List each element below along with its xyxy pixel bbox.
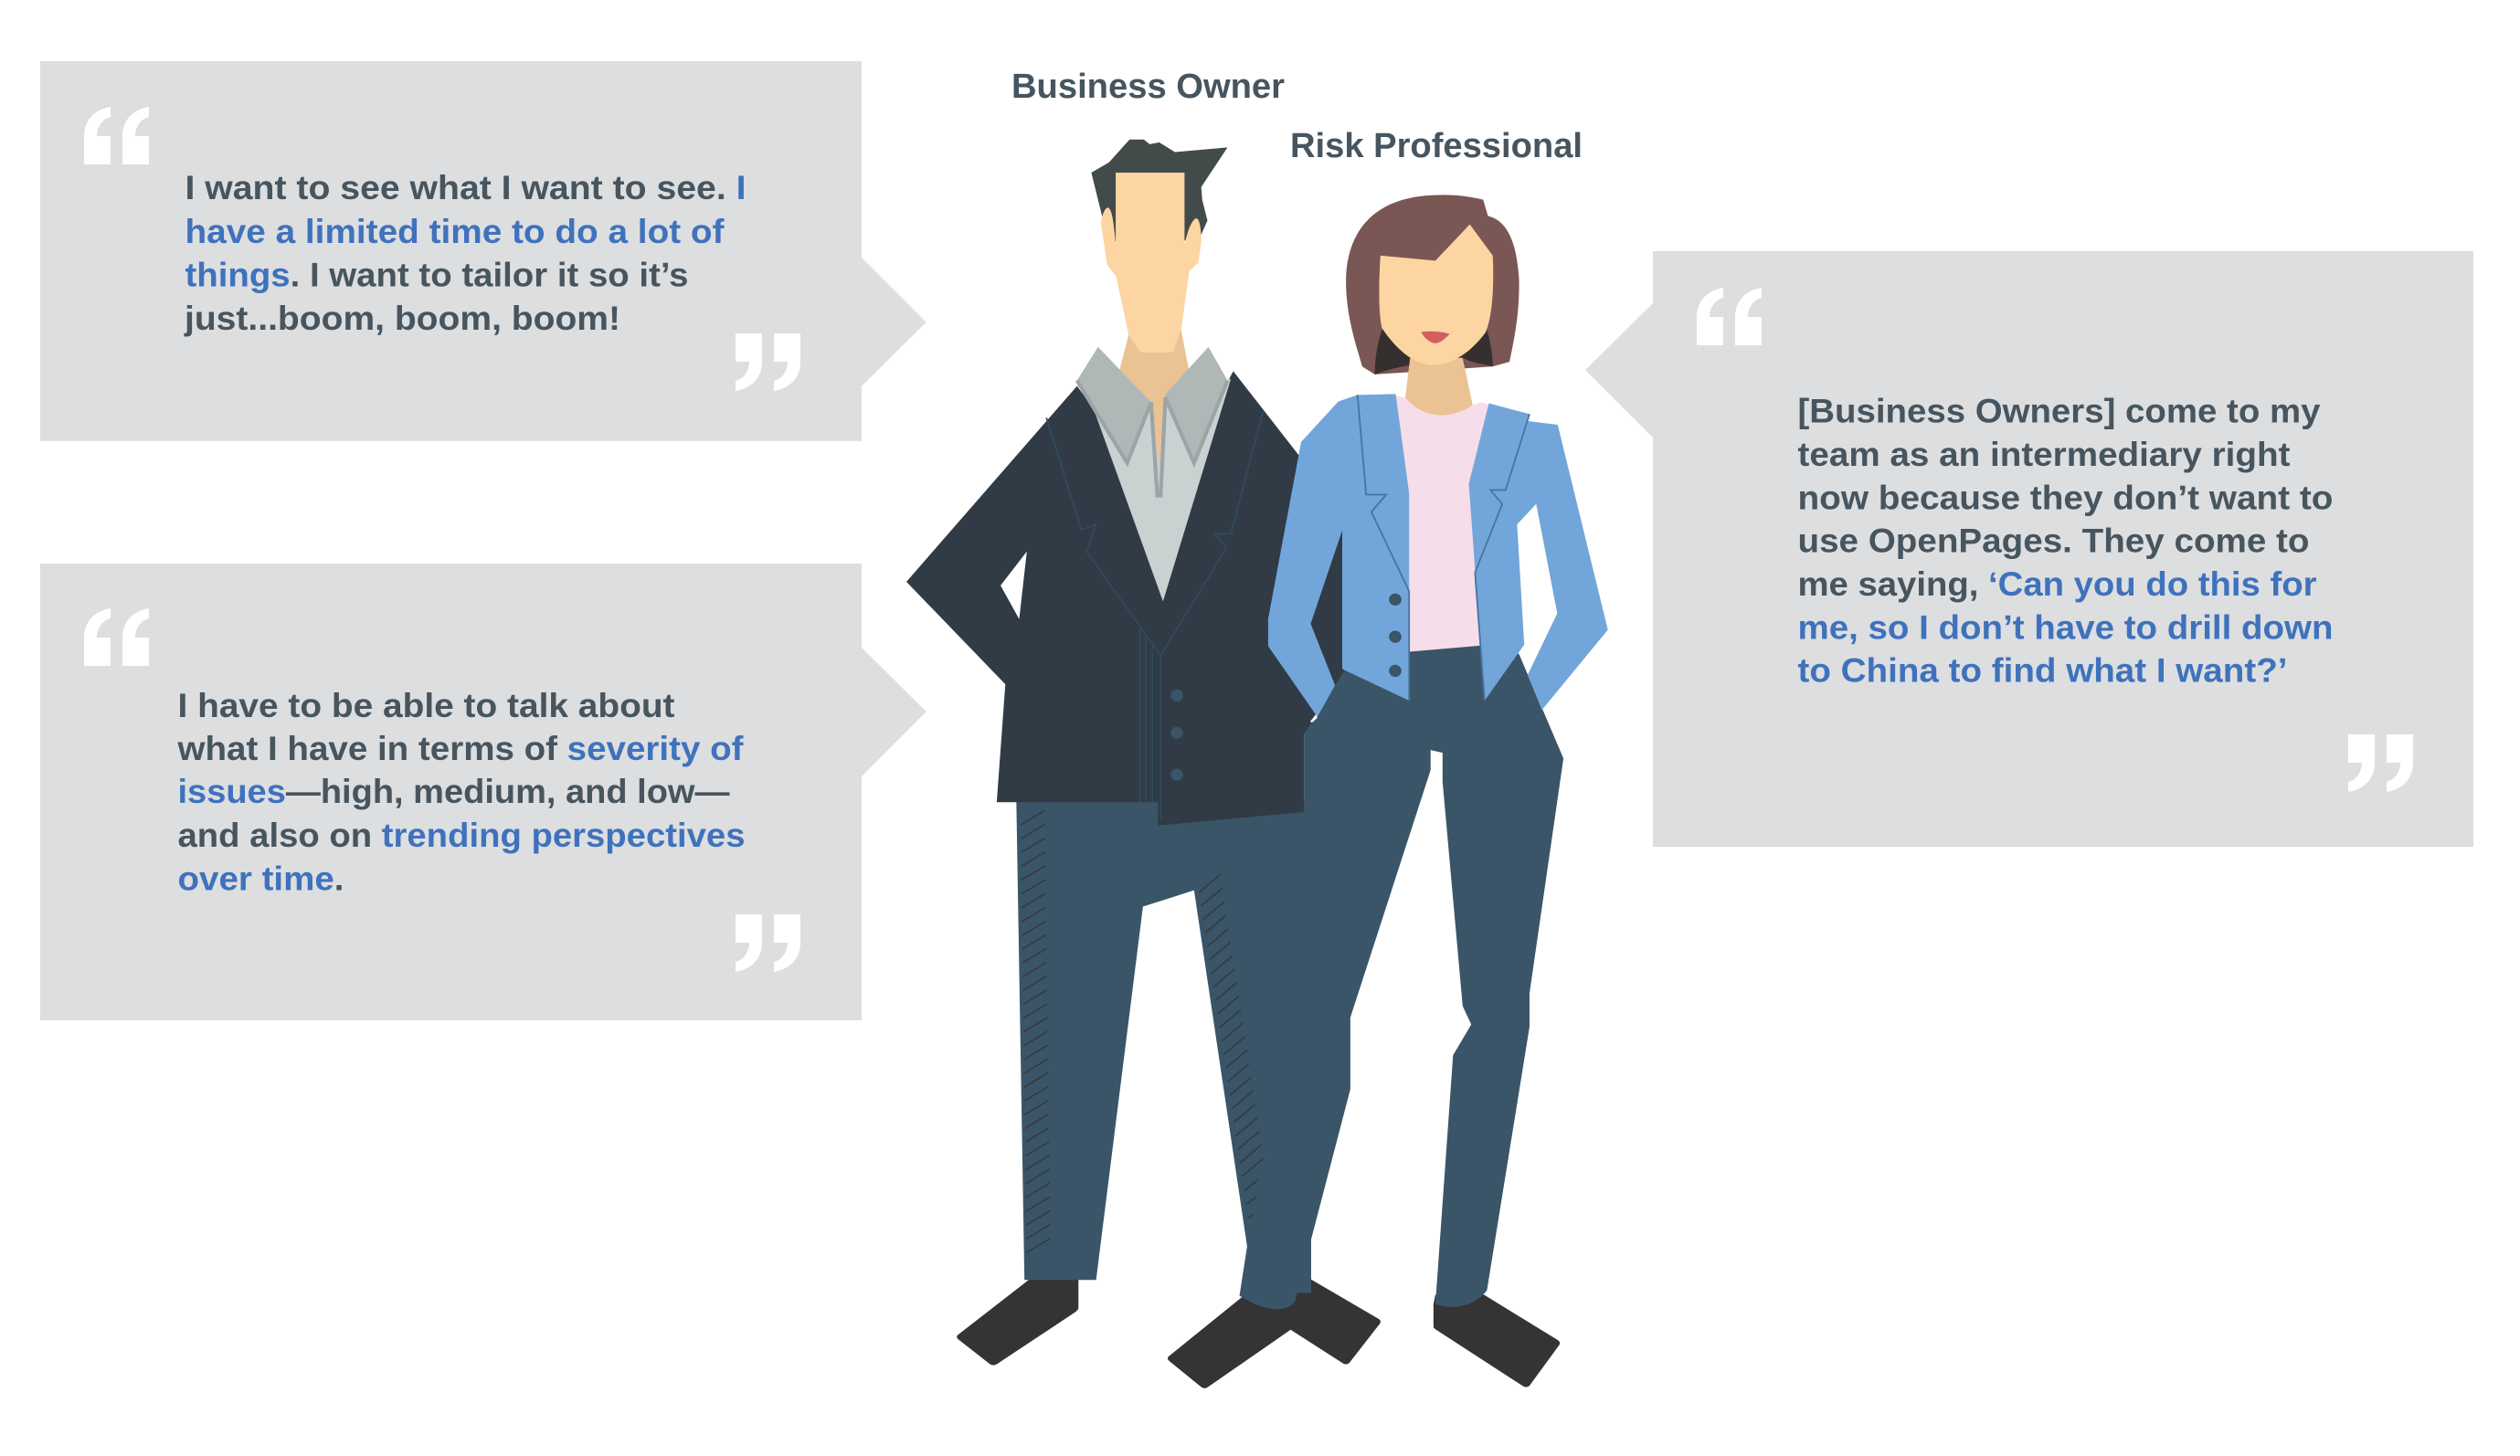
- man: hair: [1091, 140, 1227, 241]
- speech bubble background: [40, 61, 926, 441]
- man: neck: [1119, 330, 1190, 468]
- icon: closing quote mark: [736, 914, 800, 972]
- quote text: to China to find what I want?’: [1798, 650, 2288, 689]
- quote text: things. I want to tailor it so it’s: [185, 256, 689, 294]
- quote text: use OpenPages. They come to: [1798, 521, 2310, 559]
- woman: jacket: [1268, 394, 1608, 717]
- icon: opening quote mark: [1697, 288, 1762, 345]
- quote text: over time.: [177, 859, 344, 897]
- shoes: [957, 1280, 1560, 1388]
- heading: Business Owner: Business Owner: [1011, 68, 1285, 106]
- quote text: [1798, 391, 2334, 689]
- man: collar: [1077, 347, 1227, 496]
- panel: quote top left: [40, 61, 926, 441]
- panel: quote bottom left: [40, 564, 926, 1020]
- illustration: two figures: [906, 140, 1608, 1388]
- icon: opening quote mark: [84, 608, 149, 666]
- quote text: [184, 168, 746, 337]
- quote text: I want to see what I want to see. I: [185, 168, 746, 206]
- man: face and ears: [1101, 173, 1202, 353]
- woman: hair underside: [1375, 330, 1493, 375]
- gap under woman's sleeve: [1310, 714, 1318, 723]
- man: jacket buttons: [1170, 690, 1183, 781]
- woman: lips: [1421, 332, 1450, 343]
- quote text: team as an intermediary right: [1798, 435, 2291, 473]
- woman: top: [1394, 396, 1490, 651]
- speech bubble background: [1585, 251, 2473, 847]
- icon: opening quote mark: [84, 107, 149, 164]
- quote text: I have to be able to talk about: [177, 686, 675, 724]
- man: jacket: [906, 371, 1345, 826]
- speech bubble background: [40, 564, 926, 1020]
- quote text: have a limited time to do a lot of: [185, 212, 725, 250]
- quote text: issues—high, medium, and low—: [177, 772, 730, 810]
- icon: closing quote mark: [2348, 734, 2413, 792]
- woman: jacket buttons: [1389, 594, 1402, 677]
- quote text: now because they don’t want to: [1798, 479, 2334, 517]
- heading: Risk Professional: Risk Professional: [1290, 127, 1583, 165]
- icon: closing quote mark: [736, 333, 800, 391]
- quote text: just...boom, boom, boom!: [184, 299, 620, 337]
- quote text: [Business Owners] come to my: [1798, 391, 2321, 429]
- man: lapels and seams: [1046, 410, 1264, 818]
- woman: hair back: [1346, 195, 1519, 375]
- trouser hatching: [1021, 810, 1264, 1252]
- quote text: and also on trending perspectives: [177, 816, 746, 854]
- quote text: what I have in terms of severity of: [176, 729, 744, 767]
- man: shirt: [1094, 379, 1231, 601]
- woman: neck: [1405, 358, 1473, 417]
- woman: face: [1379, 225, 1493, 365]
- quote text: me saying, ‘Can you do this for: [1798, 564, 2317, 603]
- man: neck in collar: [1120, 370, 1188, 468]
- trousers: [1016, 633, 1563, 1309]
- panel: quote right: [1585, 251, 2473, 847]
- man: armpit gap: [1001, 552, 1027, 619]
- quote text: [176, 686, 746, 897]
- quote text: me, so I don’t have to drill down: [1798, 608, 2334, 647]
- woman: jacket lapels: [1358, 395, 1530, 701]
